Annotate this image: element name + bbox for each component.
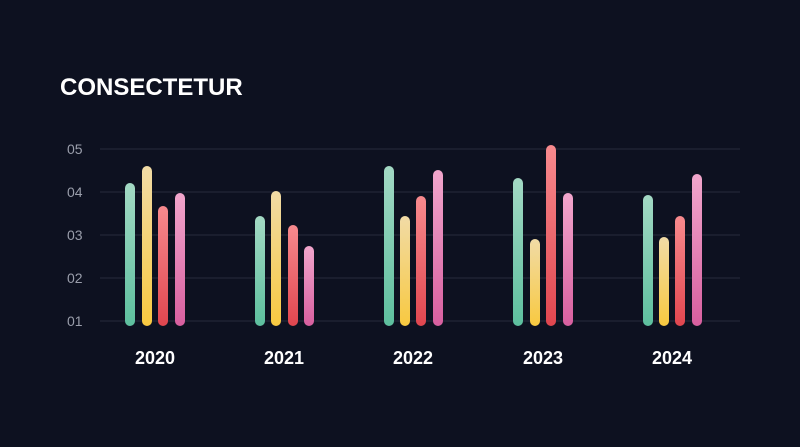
x axis labels: 2024 xyxy=(652,348,692,368)
group: 2022 xyxy=(384,166,443,326)
x axis labels xyxy=(135,348,692,368)
group: 2021 xyxy=(255,191,314,326)
x axis labels: 2023 xyxy=(523,348,563,368)
x axis labels: 2022 xyxy=(393,348,433,368)
y axis labels: 03 xyxy=(67,227,83,243)
x axis labels: 2020 xyxy=(135,348,175,368)
group: 2020 xyxy=(125,166,185,326)
bar chart xyxy=(125,145,702,326)
x axis labels: 2021 xyxy=(264,348,304,368)
y axis labels: 02 xyxy=(67,270,83,286)
y axis labels: 01 xyxy=(67,313,83,329)
y axis labels xyxy=(67,141,83,329)
title: CONSECTETUR xyxy=(60,74,243,101)
y axis labels: 04 xyxy=(67,184,83,200)
group: 2024 xyxy=(643,174,702,326)
y axis labels: 05 xyxy=(67,141,83,157)
group: 2023 xyxy=(513,145,573,326)
